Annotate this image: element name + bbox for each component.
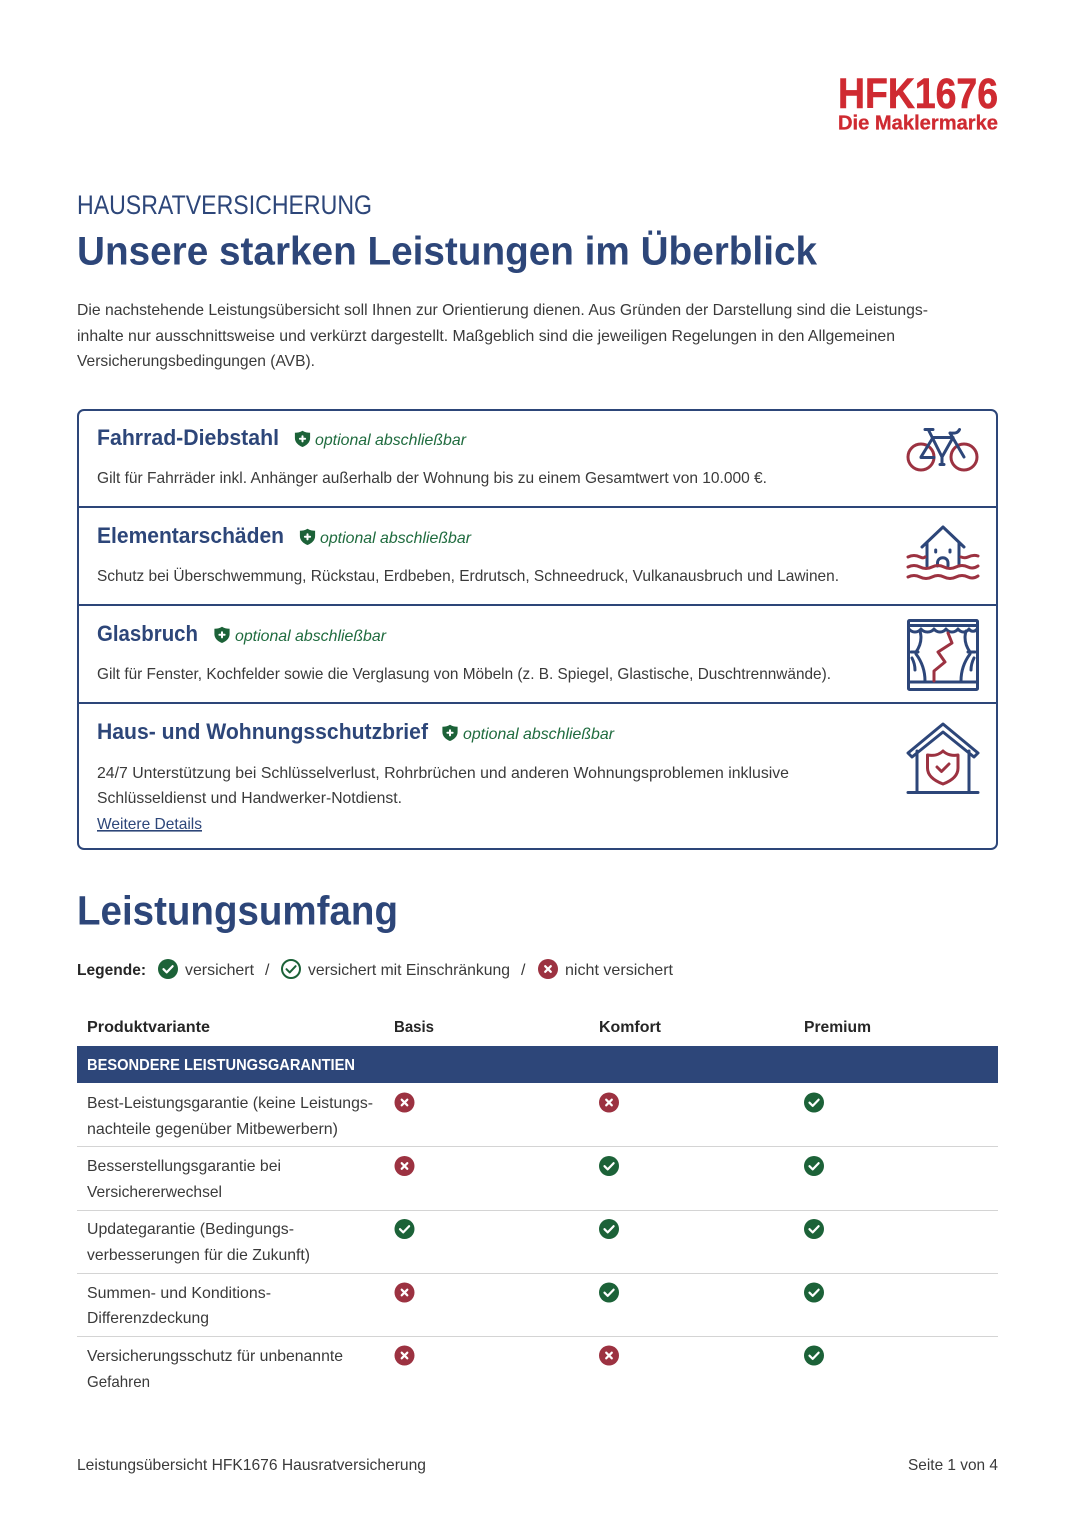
row: Fahrrad-Diebstahl: Fahrrad-Diebstahl: [97, 425, 279, 450]
row: Glasbruch: Gilt für Fenster, Kochfelder sowie die Verglasung von Möbeln (z. B. Spiegel, Glastische, Duschtrennwände).: [97, 666, 831, 683]
legend: versichert: [185, 962, 255, 979]
row 4: Summen- und Konditions-: [87, 1285, 271, 1302]
table header: [87, 1019, 871, 1036]
legend: [77, 959, 674, 979]
legend: versichert mit Einschränkung: [308, 962, 510, 979]
row 2: [87, 1156, 824, 1201]
icon: house with shield: [908, 724, 978, 792]
row: Glasbruch: optional abschließbar: [235, 628, 387, 645]
row: Fahrrad-Diebstahl: Gilt für Fahrräder inkl. Anhänger außerhalb der Wohnung bis zu einem Gesamtwert von 10.000 €.: [97, 470, 767, 487]
row: Elementarschäden: optional abschließbar: [320, 530, 472, 547]
row: Haus- und Wohnungsschutzbrief: Weitere Details: [97, 816, 202, 833]
row 5: Gefahren: [87, 1374, 150, 1391]
footer: [77, 1457, 998, 1474]
row: Fahrrad-Diebstahl: [97, 425, 767, 487]
row: Haus- und Wohnungsschutzbrief: 24/7 Unterstützung bei Schlüsselverlust, Rohrbrüchen und anderen Wohnungsproblemen inklusive: [97, 765, 789, 782]
icon: bicycle: [908, 430, 977, 470]
table section band: BESONDERE LEISTUNGSGARANTIEN: [87, 1057, 355, 1074]
row 2: Besserstellungsgarantie bei: [87, 1158, 281, 1175]
legend: /: [265, 962, 270, 979]
row 5: [87, 1346, 824, 1391]
heading: Hausratversicherung: HAUSRATVERSICHERUNG: [77, 190, 372, 220]
row 1: [87, 1092, 824, 1138]
legend: Legende:: [77, 962, 146, 979]
row: Glasbruch: Glasbruch: [97, 621, 198, 646]
row: Elementarschäden: [97, 523, 839, 585]
title: Unsere starken Leistungen im Überblick: [77, 228, 818, 274]
icon: not insured: [538, 959, 558, 979]
intro text block: Versicherungsbedingungen (AVB).: [77, 353, 315, 370]
icon: flooded house: [908, 527, 978, 578]
logo: HFK1676 Die Maklermarke: Die Maklermarke: [838, 112, 998, 134]
row: Glasbruch: [97, 621, 831, 683]
table: coverage: [77, 1019, 998, 1391]
row 4: [87, 1282, 824, 1327]
row 5: Versicherungsschutz für unbenannte: [87, 1348, 343, 1365]
table section band: [77, 1046, 998, 1083]
row: Haus- und Wohnungsschutzbrief: [97, 719, 789, 833]
row 3: verbesserungen für die Zukunft): [87, 1247, 310, 1264]
row 1: nachteile gegenüber Mitbewerbern): [87, 1121, 338, 1138]
panel: optional add-ons: [78, 410, 997, 849]
row: Haus- und Wohnungsschutzbrief: optional abschließbar: [463, 726, 615, 743]
row: Elementarschäden: Schutz bei Überschwemmung, Rückstau, Erdbeben, Erdrutsch, Schneedruck, Vulkanausbruch und Lawinen.: [97, 567, 839, 585]
logo: HFK1676 Die Maklermarke: [838, 70, 998, 134]
row 2: Versichererwechsel: [87, 1184, 222, 1201]
logo: HFK1676 Die Maklermarke: HFK1676: [838, 70, 998, 118]
row 4: Differenzdeckung: [87, 1310, 209, 1327]
row: Fahrrad-Diebstahl: optional abschließbar: [315, 432, 467, 449]
row: Elementarschäden: Elementarschäden: [97, 523, 284, 548]
row: Haus- und Wohnungsschutzbrief: Haus- und Wohnungsschutzbrief: [97, 719, 429, 744]
intro text block: [77, 302, 928, 370]
footer: Seite 1 von 4: [908, 1457, 998, 1474]
row: Haus- und Wohnungsschutzbrief: Schlüsseldienst und Handwerker-Notdienst.: [97, 790, 402, 807]
intro text block: inhalte nur ausschnittsweise und verkürzt dargestellt. Maßgeblich sind die jeweiligen Regelungen in den Allgemeinen: [77, 328, 895, 345]
footer: Leistungsübersicht HFK1676 Hausratversicherung: [77, 1457, 426, 1474]
heading: Leistungsumfang: Leistungsumfang: [77, 888, 398, 934]
table header: Premium: [804, 1019, 871, 1036]
table header: Basis: [394, 1019, 434, 1036]
legend: /: [521, 962, 526, 979]
legend: nicht versichert: [565, 962, 674, 979]
icon: insured: [158, 959, 178, 979]
icon: broken window with curtains: [908, 620, 978, 690]
row 3: [87, 1219, 824, 1264]
row 1: Best-Leistungsgarantie (keine Leistungs-: [87, 1095, 373, 1112]
table header: Komfort: [599, 1019, 662, 1036]
icon: insured with restriction: [282, 960, 300, 978]
intro text block: Die nachstehende Leistungsübersicht soll Ihnen zur Orientierung dienen. Aus Gründen der Darstellung sind die Leistungs-: [77, 302, 928, 319]
table header: Produktvariante: [87, 1019, 210, 1036]
row 3: Updategarantie (Bedingungs-: [87, 1221, 294, 1238]
